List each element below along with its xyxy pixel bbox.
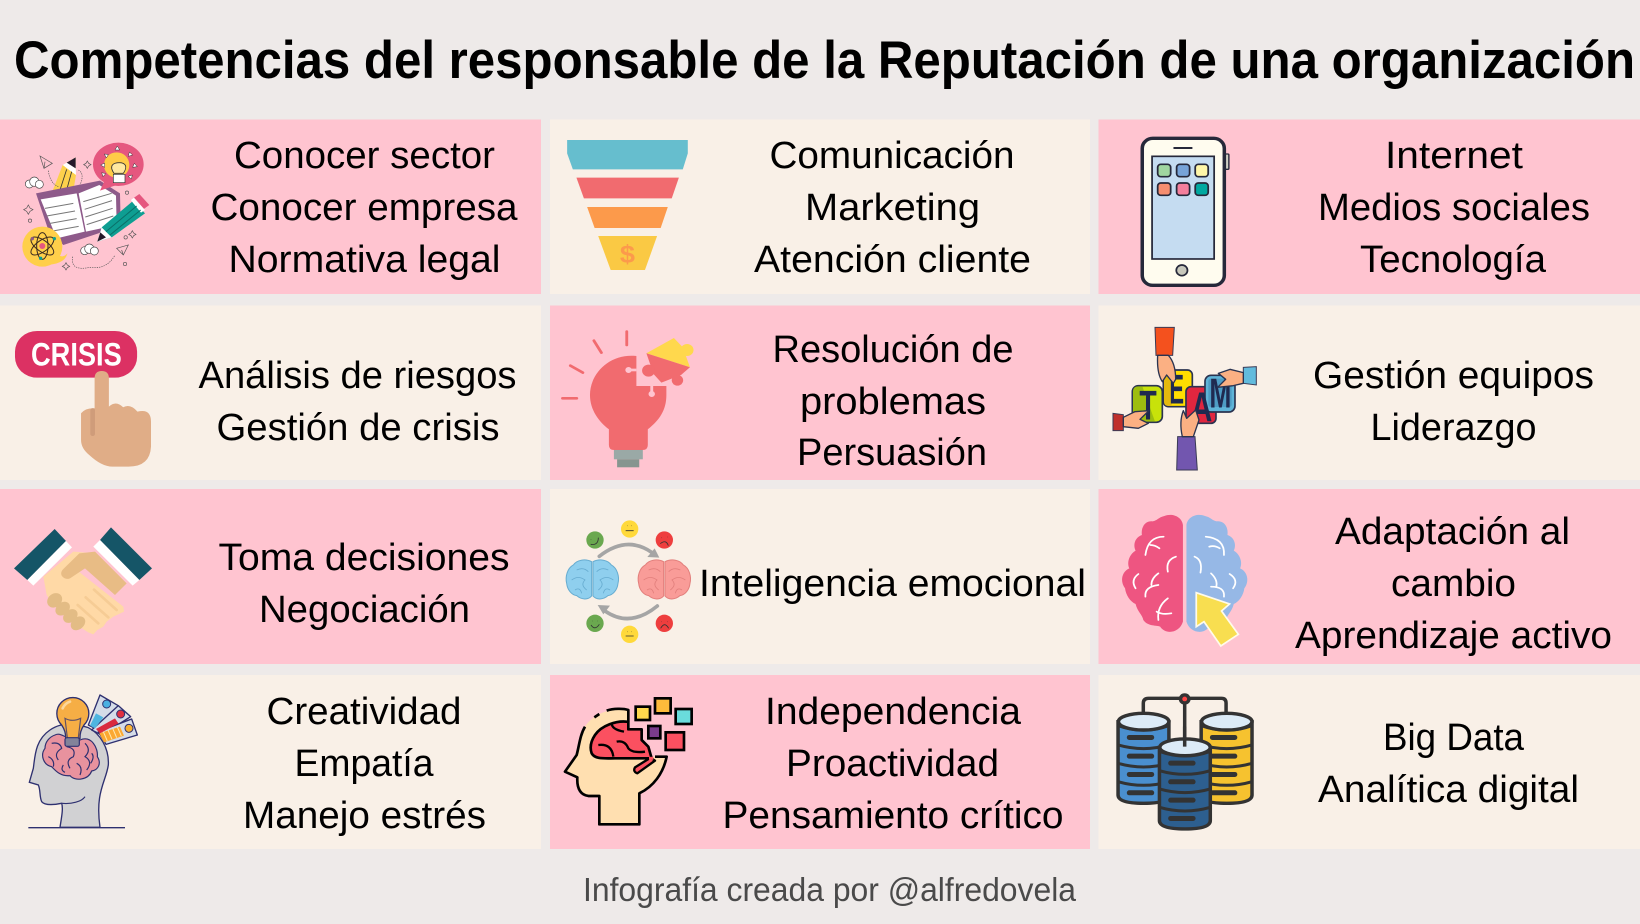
text block [754, 135, 1031, 281]
text block [243, 691, 486, 837]
icon: open book, pencils and ideas [22, 143, 149, 270]
panel: independencia [550, 675, 1090, 849]
text block: Conocer sector [234, 135, 495, 177]
text block: problemas [800, 381, 986, 423]
footer credit: Infografía creada por @alfredovela [583, 871, 1077, 908]
icon: head with brain, bulb and colour swatches [28, 695, 137, 828]
panel: creatividad [0, 675, 541, 849]
text block: cambio [1391, 563, 1516, 605]
icon: two-colour brain with cursor [1122, 515, 1247, 646]
panel: internet [1098, 120, 1640, 294]
panel: toma decisiones [0, 489, 541, 664]
text block: Liderazgo [1370, 407, 1536, 449]
text block: Creatividad [266, 691, 462, 733]
text block: Toma decisiones [218, 537, 510, 579]
text block: Analítica digital [1318, 769, 1579, 811]
text block [198, 355, 516, 449]
icon: team hands with letter tiles [1113, 327, 1256, 470]
text block [1313, 355, 1594, 449]
panel: conocer sector [0, 120, 541, 294]
panel: resolucion de problemas [550, 306, 1090, 480]
icon: crisis button and hand: CRISIS [31, 338, 122, 373]
text block: Proactividad [786, 743, 999, 785]
text block: Marketing [805, 187, 980, 229]
icon: team hands with letter tiles: E [1169, 365, 1184, 412]
text block: Big Data [1383, 717, 1525, 759]
text block [218, 537, 510, 631]
panel: comunicacion [550, 120, 1090, 294]
text block: Resolución de [772, 329, 1014, 371]
text block: Comunicación [770, 135, 1014, 177]
text block [1318, 717, 1579, 811]
text block [1318, 135, 1590, 281]
panel: gestion equipos [1098, 306, 1640, 480]
text block: Persuasión [797, 432, 987, 474]
text block: Gestión de crisis [216, 407, 500, 449]
text block: Atención cliente [754, 239, 1031, 281]
icon: smartphone [1142, 138, 1229, 285]
icon: light bulb with puzzle piece [562, 332, 694, 467]
text block: Negociación [259, 589, 470, 631]
text block: Análisis de riesgos [198, 355, 516, 397]
text block [210, 135, 518, 281]
panel: crisis [0, 306, 541, 480]
icon: team hands with letter tiles: M [1209, 369, 1231, 416]
text block: Pensamiento crítico [722, 795, 1064, 837]
icon: brains and emotion faces [566, 520, 691, 643]
text block: Adaptación al [1335, 511, 1570, 553]
panel: inteligencia emocional [550, 489, 1090, 664]
icon: funnel [567, 140, 688, 270]
icon: team hands with letter tiles: A [1191, 384, 1212, 431]
icon: crisis button and hand [15, 331, 151, 467]
text block: Medios sociales [1318, 187, 1590, 229]
panel: adaptacion al cambio [1098, 489, 1640, 664]
icon: handshake [14, 527, 152, 634]
text block [772, 329, 1014, 474]
icon: database cylinders [1118, 693, 1252, 829]
icon: funnel: $ [620, 239, 635, 268]
icon: team hands with letter tiles: T [1139, 381, 1157, 428]
text block: Aprendizaje activo [1295, 615, 1612, 657]
text block: Internet [1385, 135, 1523, 177]
text block: Empatía [294, 743, 434, 785]
text block: Tecnología [1360, 239, 1547, 281]
text block: Manejo estrés [243, 795, 486, 837]
text block: Inteligencia emocional [699, 563, 1086, 605]
text block: Gestión equipos [1313, 355, 1594, 397]
icon: head with red brain and squares [565, 698, 692, 824]
panel: big data [1098, 675, 1640, 849]
text block [722, 691, 1064, 837]
text block: Normativa legal [228, 239, 500, 281]
text block: Independencia [765, 691, 1022, 733]
text block [1295, 511, 1612, 657]
text block: Conocer empresa [210, 187, 518, 229]
